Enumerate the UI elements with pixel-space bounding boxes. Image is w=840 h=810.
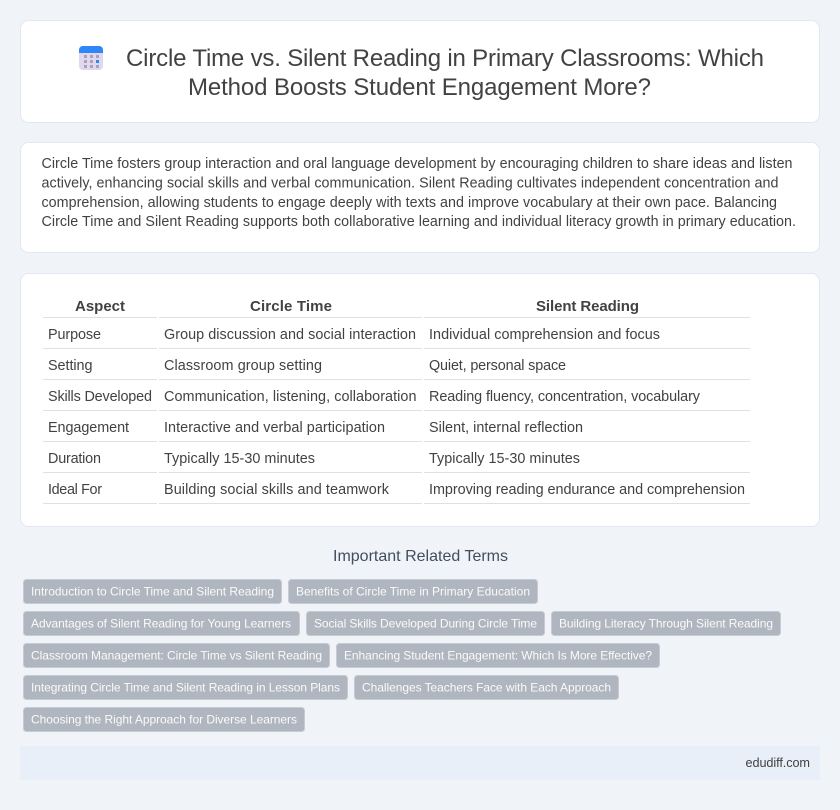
row: Setting: Classroom group setting bbox=[164, 358, 322, 374]
row: Ideal For: Building social skills and teamwork bbox=[164, 482, 390, 498]
row: Skills Developed bbox=[48, 389, 701, 405]
tag bbox=[552, 612, 780, 636]
row: Engagement: Silent, internal reflection bbox=[429, 420, 583, 436]
comparison table panel bbox=[20, 274, 820, 526]
tag bbox=[24, 580, 282, 604]
row: Duration: Typically 15-30 minutes bbox=[429, 451, 580, 467]
row: Purpose: Group discussion and social interaction bbox=[164, 327, 416, 343]
row: Purpose bbox=[48, 327, 660, 343]
table header: Silent Reading: Silent Reading bbox=[536, 298, 639, 315]
tag: Classroom Management: Circle Time vs Silent Reading bbox=[31, 648, 322, 662]
row: Ideal For: Ideal For bbox=[48, 482, 102, 498]
header panel bbox=[20, 20, 820, 122]
related terms tags bbox=[24, 580, 780, 732]
row: Engagement: Interactive and verbal participation bbox=[164, 420, 385, 436]
tag: Integrating Circle Time and Silent Reading in Lesson Plans bbox=[31, 680, 340, 694]
table header: Aspect: Aspect bbox=[75, 298, 125, 315]
row: Skills Developed: Reading fluency, concentration, vocabulary bbox=[429, 389, 701, 405]
tag: Social Skills Developed During Circle Time bbox=[314, 616, 537, 630]
table header: Circle Time: Circle Time bbox=[250, 298, 332, 315]
tag: Introduction to Circle Time and Silent Reading bbox=[31, 584, 274, 598]
tag bbox=[306, 612, 544, 636]
intro paragraph: comprehension, allowing students to engage deeply with texts and improve vocabulary at their own pace. Balancing bbox=[42, 195, 777, 211]
icon: calendar bbox=[79, 46, 103, 70]
row: Duration bbox=[48, 451, 580, 467]
intro paragraph: Circle Time fosters group interaction and oral language development by encouraging children to share ideas and listen bbox=[42, 156, 793, 172]
tag bbox=[336, 644, 660, 668]
tag bbox=[24, 708, 304, 732]
intro paragraph: Circle Time and Silent Reading supports both collaborative learning and individual literacy growth in primary education. bbox=[42, 214, 796, 230]
row: Skills Developed: Skills Developed bbox=[48, 389, 152, 405]
row: Purpose: Purpose bbox=[48, 327, 101, 343]
footer source text: edudiff.com bbox=[746, 756, 810, 770]
related terms heading: Important Related Terms bbox=[333, 548, 508, 565]
tag: Building Literacy Through Silent Reading bbox=[559, 616, 773, 630]
tag: Benefits of Circle Time in Primary Education bbox=[296, 584, 530, 598]
tag: Enhancing Student Engagement: Which Is More Effective? bbox=[344, 648, 652, 662]
tag: Challenges Teachers Face with Each Approach bbox=[362, 680, 611, 694]
footer bar bbox=[20, 746, 820, 780]
row: Setting: Setting bbox=[48, 358, 92, 374]
row: Duration: Typically 15-30 minutes bbox=[164, 451, 315, 467]
row: Ideal For bbox=[48, 482, 745, 498]
row: Duration: Duration bbox=[48, 451, 101, 467]
row: Engagement bbox=[48, 420, 583, 436]
title: Circle Time vs. Silent Reading in Primary Classrooms: Which bbox=[126, 45, 764, 72]
tag bbox=[24, 612, 300, 636]
row: Setting bbox=[48, 358, 566, 374]
tag bbox=[354, 676, 618, 700]
row: Skills Developed: Communication, listening, collaboration bbox=[164, 389, 416, 405]
tag bbox=[24, 644, 330, 668]
tag bbox=[288, 580, 538, 604]
row: Ideal For: Improving reading endurance and comprehension bbox=[429, 482, 745, 498]
intro paragraph: actively, enhancing social skills and verbal communication. Silent Reading cultivates independent concentration and bbox=[42, 176, 779, 192]
tag: Choosing the Right Approach for Diverse Learners bbox=[31, 712, 297, 726]
intro text panel bbox=[20, 142, 820, 252]
tag: Advantages of Silent Reading for Young Learners bbox=[31, 616, 291, 630]
tag bbox=[24, 676, 348, 700]
row: Setting: Quiet, personal space bbox=[429, 358, 566, 374]
comparison table bbox=[43, 298, 750, 504]
row: Purpose: Individual comprehension and focus bbox=[429, 327, 660, 343]
title: Method Boosts Student Engagement More? bbox=[188, 74, 651, 101]
row: Engagement: Engagement bbox=[48, 420, 129, 436]
